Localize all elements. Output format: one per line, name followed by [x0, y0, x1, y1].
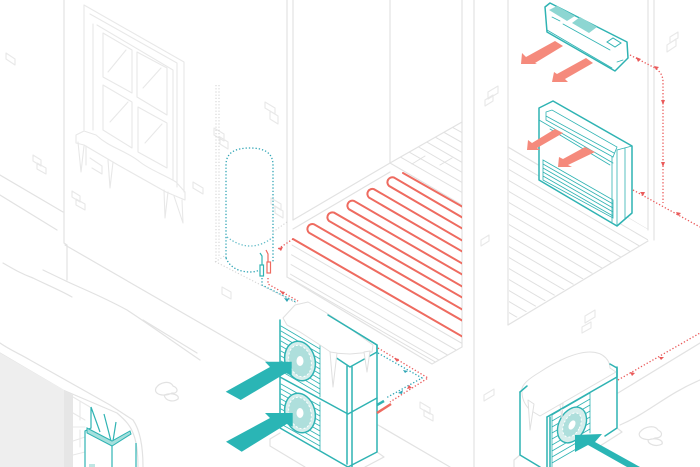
- room 1 floor edges: [287, 122, 462, 364]
- wall-mounted indoor unit: [545, 3, 628, 71]
- stacked outdoor heat pump: [280, 302, 377, 467]
- small unit intake arrow: [575, 434, 640, 467]
- water tank: [215, 85, 298, 304]
- small outdoor unit: [520, 357, 617, 467]
- small unit snow cap: [520, 352, 617, 430]
- heat pump snow cap: [283, 302, 377, 387]
- intake arrows on stacked unit: [226, 362, 293, 452]
- small unit plinth: [514, 428, 622, 467]
- refrigerant pipes indoor: [262, 239, 298, 302]
- room 2 floor boards: [509, 158, 648, 318]
- room 1 main floor boards: [290, 244, 462, 362]
- room 1 back floor boards: [400, 128, 462, 192]
- brick marks on walls: [6, 32, 678, 421]
- wall-unit warm air arrows: [521, 41, 593, 82]
- refrigerant pipe to indoor units: [618, 55, 700, 380]
- tank connection valves: [260, 250, 270, 276]
- basement cutaway with unit: [0, 353, 136, 467]
- stacked unit plinth: [270, 433, 384, 467]
- floor-unit warm air arrows: [527, 129, 595, 167]
- pipe stubs and outdoor pipework: [377, 348, 428, 413]
- room 2 floor edge: [508, 147, 648, 325]
- snow mounds: [156, 382, 662, 445]
- window with icicles: [76, 5, 185, 223]
- floor-standing indoor unit: [539, 101, 632, 226]
- heat pump fans: [280, 338, 320, 436]
- underfloor heating pipe: [293, 173, 470, 341]
